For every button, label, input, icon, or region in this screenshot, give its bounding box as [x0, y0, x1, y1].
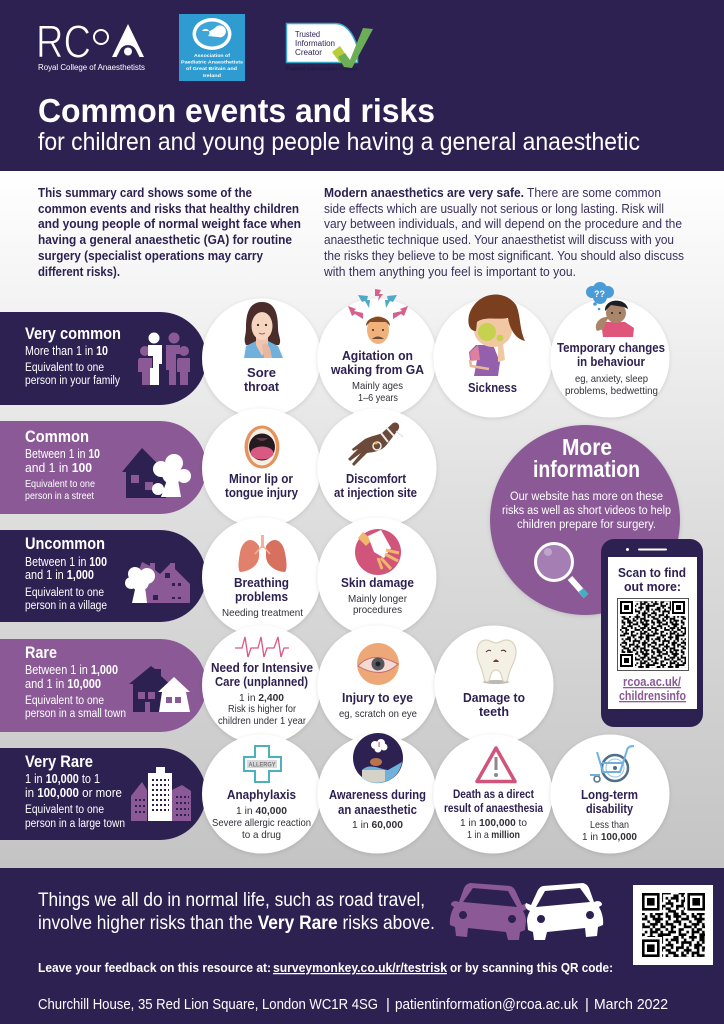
panel: common	[0, 421, 206, 514]
panel: common: Common	[25, 427, 89, 446]
label: Sore	[247, 365, 276, 380]
icon: magnifying glass	[536, 544, 586, 596]
intro text: safety: vary between individuals, and will depend on the procedure and the	[324, 217, 682, 231]
intro text: safety: anaesthetic technique used. Your anaesthetist will discuss with you	[324, 233, 674, 247]
logo: Association of Paediatric Anaesthetists: Ireland	[203, 73, 221, 78]
contact line: Churchill House, 35 Red Lion Square, London WC1R 4SG	[38, 996, 378, 1013]
icon: village	[125, 562, 190, 603]
panel: agitation: 1–6 years	[358, 392, 398, 404]
panel: death: result of anaesthesia	[444, 801, 543, 815]
logo: Trusted Information Creator: Patient Information Forum	[286, 66, 357, 72]
panel: very rare: Equivalent to one	[25, 804, 104, 816]
icon: sick girl	[468, 295, 525, 376]
panel: uncommon: Uncommon	[25, 534, 105, 553]
footer statement	[38, 890, 435, 934]
intro text: safety: the risks they believe to be most significant. You should also discuss	[324, 249, 684, 263]
intro text: safety: with them anything you feel is important to you.	[323, 265, 576, 279]
panel: very rare: 1 in 10,000 to 1	[25, 772, 100, 786]
panel: awareness	[318, 733, 436, 854]
icon: city buildings	[131, 767, 191, 821]
panel: lip injury: tongue injury	[225, 485, 299, 500]
QR code: website	[618, 598, 688, 670]
panel: uncommon: Equivalent to one	[25, 587, 104, 599]
panel: sore throat: throat	[244, 379, 280, 394]
icon: heartbeat line	[235, 637, 289, 657]
logo: Royal College of Anaesthetists: Royal College of Anaesthetists	[38, 63, 145, 72]
contact line: March 2022	[594, 996, 668, 1013]
panel: more information: information	[533, 456, 640, 482]
icon: eye	[357, 643, 399, 685]
website link	[619, 674, 686, 703]
panel: anaphylaxis: to a drug	[242, 829, 281, 841]
panel: uncommon: Between 1 in 100	[25, 555, 107, 569]
label: Sickness	[468, 380, 517, 395]
QR code: feedback	[633, 885, 713, 965]
panel: intensive care: Care (unplanned)	[215, 674, 308, 689]
panel: injury to eye	[318, 626, 436, 744]
panel: intensive care: children under 1 year	[218, 715, 306, 727]
contact line: |	[386, 996, 390, 1013]
intro text: summary: and young people of normal weight face when	[38, 217, 301, 231]
label: Temporary changes	[557, 340, 665, 355]
logo: Trusted Information Creator: Trusted	[295, 30, 320, 39]
header band	[0, 0, 724, 171]
panel: behaviour: in behaviour	[577, 354, 645, 369]
panel: rare: Rare	[25, 643, 57, 662]
panel: injury to eye: eg, scratch on eye	[339, 708, 417, 720]
panel: very rare: person in a large town	[25, 818, 125, 830]
panel: intensive care	[202, 626, 321, 744]
panel: uncommon	[0, 530, 206, 622]
panel: breathing	[202, 518, 321, 636]
phone card: Scan to find	[618, 565, 686, 580]
panel: more information	[490, 425, 680, 615]
panel: very common	[0, 312, 206, 405]
panel: awareness: 1 in 60,000	[352, 819, 403, 831]
icon: purple car	[450, 883, 528, 940]
feedback line: surveymonkey.co.uk/r/testrisk	[273, 961, 447, 975]
icon: hand with cannula	[348, 423, 403, 466]
panel: behaviour: eg, anxiety, sleep	[575, 373, 648, 385]
panel: rare: Equivalent to one	[25, 695, 104, 707]
label: Agitation on	[342, 348, 413, 363]
panel: intensive care: Risk is higher for	[228, 703, 296, 715]
logo: Association of Paediatric Anaesthetists: Paediatric Anaesthetists	[181, 60, 244, 64]
intro text: summary: having a general anaesthetic (GA) for routine	[38, 233, 292, 247]
intro text: summary: different risks).	[38, 265, 120, 279]
icon: houses	[129, 666, 190, 712]
label: Death as a direct	[453, 787, 534, 801]
panel: very rare	[0, 748, 206, 840]
intro text: safety: side effects which are usually not serious or long lasting. Risk will	[324, 202, 664, 216]
panel: disability: disability	[586, 801, 634, 816]
icon: lungs	[238, 535, 286, 572]
panel: sickness	[434, 295, 552, 418]
icon: agitated boy	[348, 289, 408, 344]
panel: lip injury	[202, 408, 321, 528]
logo: Trusted Information Creator: Creator	[295, 48, 322, 57]
panel: sore throat	[202, 298, 321, 418]
panel: skin damage: Mainly longer	[348, 593, 407, 605]
icon: warning triangle	[477, 748, 515, 782]
panel: death: 1 in a million	[467, 829, 520, 841]
panel: agitation	[318, 289, 436, 418]
panel: death	[434, 734, 552, 854]
label: Damage to	[463, 690, 525, 705]
website link: childrensinfo	[619, 688, 686, 703]
label: Skin damage	[341, 575, 414, 590]
panel: rare	[0, 639, 206, 732]
logo: Association of Paediatric Anaesthetists	[179, 14, 245, 81]
label: Injury to eye	[342, 690, 413, 705]
logo: Association of Paediatric Anaesthetists: Association of	[194, 53, 231, 58]
label: Anaphylaxis	[227, 787, 296, 802]
title: Common events and risks	[38, 93, 435, 130]
panel: common: person in a street	[25, 490, 94, 502]
panel: more information: More	[562, 434, 612, 460]
footer statement: involve higher risks than the Very Rare risks above.	[38, 913, 435, 934]
intro text: safety: There are some common	[527, 186, 661, 200]
panel: intensive care: 1 in 2,400	[239, 692, 284, 704]
panel: agitation: Mainly ages	[352, 380, 403, 392]
logo: Trusted Information Creator	[286, 24, 373, 72]
panel: anaphylaxis: 1 in 40,000	[236, 805, 287, 817]
label: Minor lip or	[229, 471, 293, 486]
panel: death: 1 in 100,000 to	[460, 817, 527, 829]
label: Breathing	[234, 575, 289, 590]
panel: breathing: Needing treatment	[222, 607, 303, 619]
icon: wheelchair	[590, 746, 634, 782]
panel: anaphylaxis: Severe allergic reaction	[212, 817, 311, 829]
panel: rare: and 1 in 10,000	[25, 677, 101, 691]
intro text: summary: common events and risks that healthy children	[38, 202, 299, 216]
label: Need for Intensive	[211, 660, 313, 675]
panel: common: Equivalent to one	[25, 478, 95, 490]
panel: more information: Our website has more on these	[510, 491, 663, 503]
panel: disability	[550, 734, 670, 854]
panel: very common: Equivalent to one	[25, 362, 104, 374]
panel: agitation: waking from GA	[330, 362, 425, 377]
panel: very rare: Very Rare	[25, 752, 93, 771]
intro text: safety	[323, 186, 684, 279]
intro text: summary	[38, 186, 301, 279]
panel: disability: Less than	[590, 819, 629, 831]
panel: skin damage	[318, 518, 436, 636]
icon: girl with sore throat	[244, 302, 283, 358]
panel: behaviour	[550, 282, 670, 418]
panel: anaphylaxis	[202, 734, 321, 854]
logo: Trusted Information Creator: Information	[295, 39, 335, 48]
phone card: out more:	[624, 579, 681, 594]
icon: sad tooth	[477, 640, 516, 684]
logo: Royal College of Anaesthetists	[36, 16, 145, 72]
intro text: summary: This summary card shows some of the	[38, 186, 252, 200]
icon: white car	[525, 883, 603, 940]
panel: breathing: problems	[235, 589, 288, 604]
phone card	[601, 539, 703, 727]
panel: more information: risks as well as short videos to help	[502, 505, 671, 517]
feedback line: Leave your feedback on this resource at:	[38, 961, 271, 975]
feedback line: or by scanning this QR code:	[450, 961, 613, 975]
panel: very common: person in your family	[25, 375, 120, 387]
label: Awareness during	[329, 787, 426, 802]
panel: more information: children prepare for surgery.	[517, 519, 656, 531]
label: Discomfort	[346, 471, 407, 486]
contact line: |	[585, 996, 589, 1013]
intro text: safety: Modern anaesthetics are very safe.	[324, 186, 524, 200]
logo: Association of Paediatric Anaesthetists: of Great Britain and	[186, 66, 237, 71]
panel: very rare: in 100,000 or more	[25, 786, 122, 800]
icon: confused boy: ??	[594, 289, 605, 299]
website link: rcoa.ac.uk/	[623, 674, 681, 689]
icon: patient in bed	[353, 733, 403, 783]
panel: rare: Between 1 in 1,000	[25, 663, 118, 677]
panel: very common: More than 1 in 10	[25, 344, 108, 358]
panel: skin damage: procedures	[353, 604, 402, 616]
panel: disability: 1 in 100,000	[582, 831, 637, 843]
panel: uncommon: and 1 in 1,000	[25, 568, 94, 582]
panel: uncommon: person in a village	[25, 600, 107, 612]
panel: damage to teeth	[434, 626, 554, 744]
panel: behaviour: problems, bedwetting	[565, 385, 658, 397]
label: Long-term	[581, 787, 638, 802]
icon: allergy cross: ALLERGY	[248, 762, 276, 768]
footer band	[0, 868, 724, 1024]
contact line	[38, 996, 668, 1013]
icon: bandaged hand	[355, 529, 401, 575]
panel: awareness: an anaesthetic	[338, 802, 417, 817]
icon: family	[138, 332, 190, 385]
intro text: summary: surgery (specialist operations may carry	[38, 249, 263, 263]
panel: discomfort: at injection site	[334, 485, 417, 500]
feedback line	[38, 961, 613, 975]
icon: house and tree	[122, 448, 191, 498]
subtitle: for children and young people having a general anaesthetic	[38, 128, 640, 156]
contact line: patientinformation@rcoa.ac.uk	[395, 996, 578, 1013]
panel: common: Between 1 in 10	[25, 447, 100, 461]
panel: damage to teeth: teeth	[479, 704, 509, 719]
panel: common: and 1 in 100	[25, 461, 92, 475]
footer statement: Things we all do in normal life, such as road travel,	[38, 890, 425, 911]
logo: Royal College of Anaesthetists: RC	[36, 16, 91, 68]
panel: rare: person in a small town	[25, 708, 126, 720]
panel: discomfort	[318, 408, 436, 528]
icon: open mouth	[244, 426, 280, 468]
panel: very common: Very common	[25, 324, 121, 343]
